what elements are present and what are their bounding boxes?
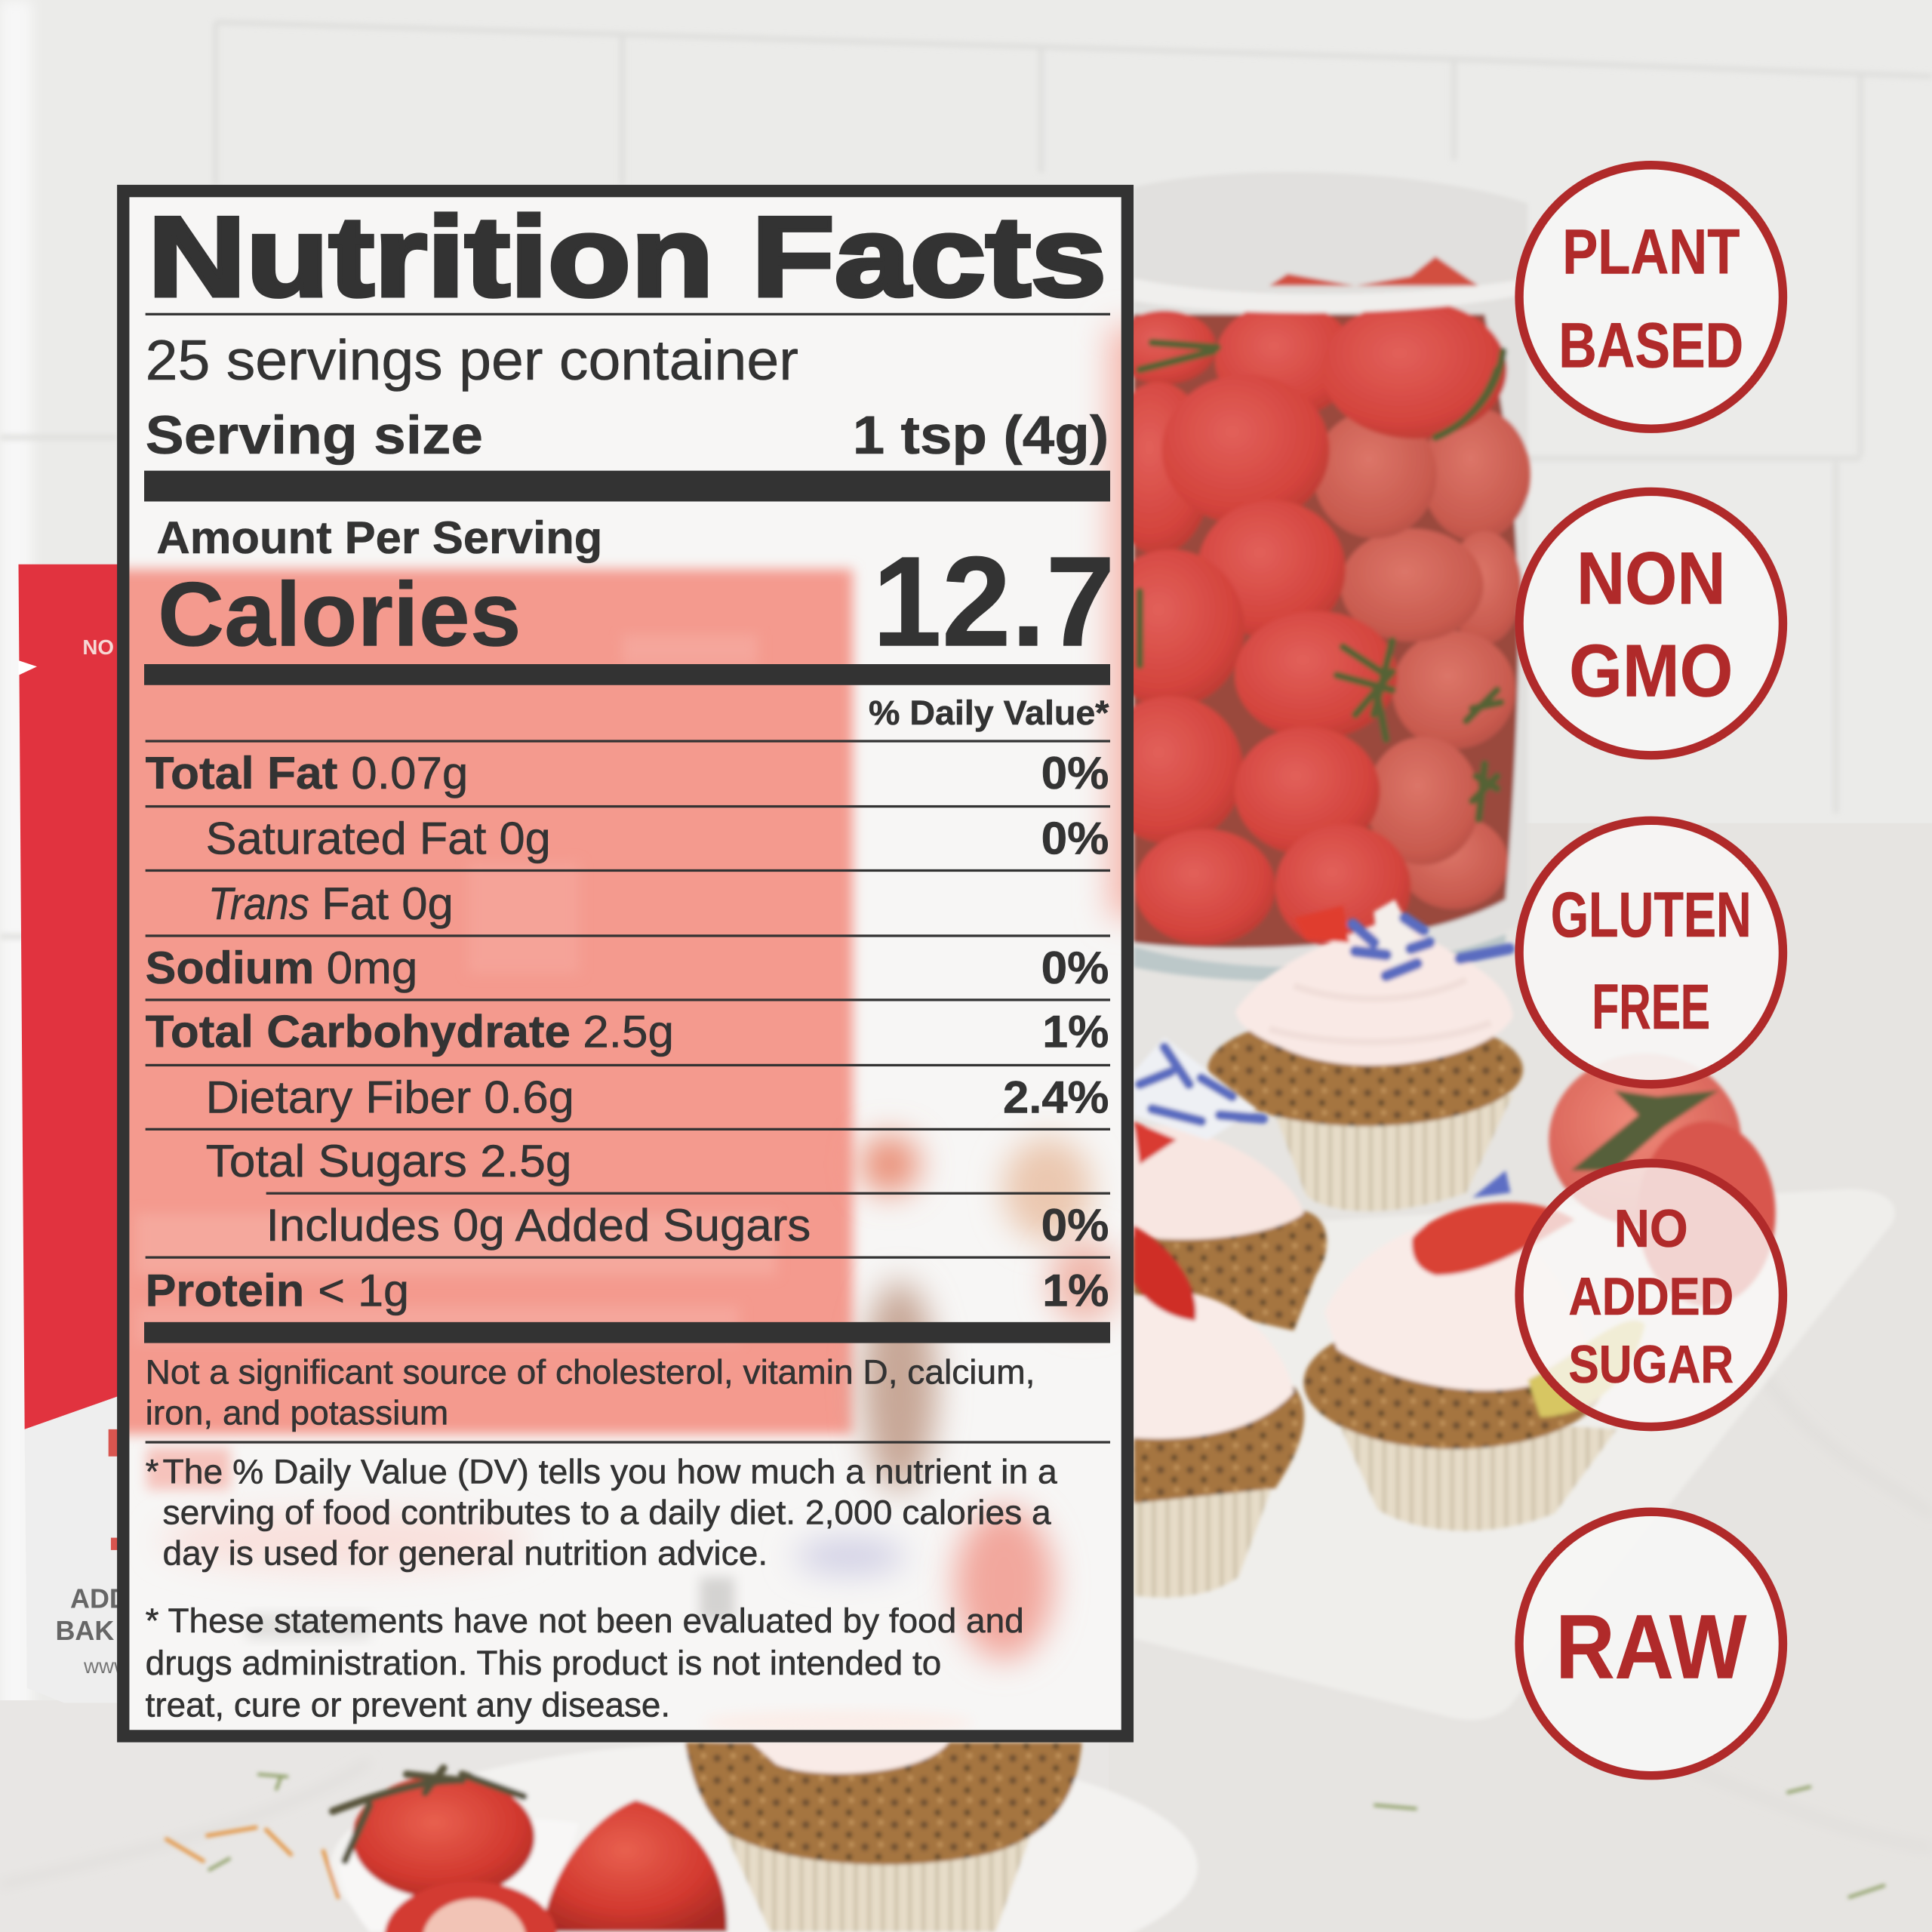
title: Nutrition Facts bbox=[148, 193, 1106, 320]
calories row: 12.7 bbox=[872, 530, 1115, 673]
badge: raw: RAW bbox=[1555, 1596, 1746, 1698]
badge: no added sugar: NO bbox=[1614, 1198, 1688, 1258]
row: saturated fat: Saturated Fat 0g bbox=[206, 812, 551, 863]
calories row bbox=[158, 530, 1115, 673]
serving size row: Serving size bbox=[146, 405, 483, 466]
serving size row bbox=[146, 405, 1109, 466]
badge: raw bbox=[1519, 1512, 1783, 1776]
row: total fat: 0% bbox=[1041, 747, 1109, 798]
row: saturated fat: 0% bbox=[1041, 812, 1109, 863]
calories row: Calories bbox=[158, 564, 521, 666]
row: total fat: 0.07g bbox=[351, 747, 468, 798]
footnote: daily value explanation: * bbox=[146, 1453, 159, 1491]
photo: marble serving board bbox=[1134, 1189, 1895, 1720]
daily value heading: % Daily Value* bbox=[869, 694, 1109, 732]
bag text fragments: ADD bbox=[70, 1583, 129, 1614]
row: protein: < 1g bbox=[318, 1265, 409, 1316]
row: sodium: 0mg bbox=[327, 942, 417, 993]
row: added sugars bbox=[266, 1199, 1109, 1251]
disclaimer bbox=[146, 1601, 1024, 1724]
badge: non gmo: GMO bbox=[1569, 629, 1733, 712]
footnote: daily value explanation: The % Daily Value (DV) tells you how much a nutrient in a bbox=[163, 1453, 1057, 1491]
photo: cupcake lower right bbox=[1303, 1171, 1645, 1531]
row: total sugars: Total Sugars 2.5g bbox=[206, 1135, 572, 1186]
row: sodium: Sodium bbox=[146, 942, 314, 993]
badge: plant based bbox=[1519, 165, 1783, 429]
badge: non gmo bbox=[1519, 491, 1783, 755]
servings per container: 25 servings per container bbox=[146, 328, 798, 392]
panel: nutrition facts label bbox=[74, 191, 1158, 1736]
badge: gluten free: GLUTEN bbox=[1551, 878, 1752, 950]
badge: no added sugar: SUGAR bbox=[1568, 1334, 1734, 1394]
photo: cupcake top right bbox=[1208, 900, 1523, 1211]
serving size row: 1 tsp (4g) bbox=[853, 405, 1109, 466]
row: trans fat: Fat 0g bbox=[321, 878, 454, 929]
disclaimer: treat, cure or prevent any disease. bbox=[146, 1685, 670, 1724]
row: trans fat: Trans bbox=[208, 878, 309, 929]
badge: gluten free bbox=[1519, 820, 1783, 1084]
badge: plant based: PLANT bbox=[1562, 215, 1740, 287]
footnote: not a significant source bbox=[146, 1352, 1035, 1432]
row: protein: Protein bbox=[146, 1265, 304, 1316]
bag text fragments: www bbox=[83, 1654, 130, 1678]
badge: no added sugar bbox=[1519, 1163, 1783, 1427]
footnote: daily value explanation bbox=[146, 1453, 1057, 1572]
photo: glass jar of strawberries bbox=[1097, 172, 1531, 981]
amount per serving heading: Amount Per Serving bbox=[156, 512, 602, 563]
badge: gluten free: FREE bbox=[1592, 971, 1710, 1042]
row: dietary fiber: 2.4% bbox=[1003, 1071, 1109, 1122]
row: trans fat bbox=[208, 878, 454, 929]
row: total fat bbox=[146, 747, 1109, 798]
row: total fat: Total Fat bbox=[146, 747, 337, 798]
photo: whole strawberries behind bbox=[1549, 1054, 1776, 1306]
photo: cupcake lower left bbox=[1134, 1226, 1304, 1598]
footnote: not a significant source: iron, and potassium bbox=[146, 1393, 448, 1432]
row: dietary fiber bbox=[206, 1071, 1109, 1122]
row: dietary fiber: Dietary Fiber 0.6g bbox=[206, 1071, 574, 1122]
row: total carbohydrate bbox=[146, 1006, 1109, 1057]
footnote: daily value explanation: day is used for general nutrition advice. bbox=[163, 1534, 768, 1572]
badge: plant based: BASED bbox=[1558, 309, 1743, 381]
row: protein bbox=[146, 1265, 1109, 1316]
bag text fragments: NO bbox=[82, 635, 114, 659]
row: total carbohydrate: Total Carbohydrate bbox=[146, 1006, 571, 1057]
photo: plate with cupcake and strawberries at bottom bbox=[165, 1741, 1885, 1932]
row: total carbohydrate: 2.5g bbox=[583, 1006, 674, 1057]
badge: non gmo: NON bbox=[1577, 537, 1726, 620]
badge: no added sugar: ADDED bbox=[1568, 1266, 1734, 1326]
bag text fragments: BAK bbox=[55, 1615, 114, 1646]
row: saturated fat bbox=[206, 812, 1109, 863]
footnote: not a significant source: Not a significant source of cholesterol, vitamin D, calcium, bbox=[146, 1352, 1035, 1391]
photo: product bag behind the label bbox=[18, 565, 130, 1703]
row: protein: 1% bbox=[1042, 1265, 1109, 1316]
nutrient table bbox=[146, 740, 1110, 1316]
photo: cupcake middle left bbox=[1134, 1038, 1327, 1331]
row: total carbohydrate: 1% bbox=[1042, 1006, 1109, 1057]
footnote: daily value explanation: serving of food contributes to a daily diet. 2,000 calories a bbox=[163, 1494, 1051, 1532]
row: added sugars: 0% bbox=[1041, 1199, 1109, 1251]
row: added sugars: Includes 0g Added Sugars bbox=[266, 1199, 811, 1251]
row: sodium: 0% bbox=[1041, 942, 1109, 993]
disclaimer: * These statements have not been evaluated by food and bbox=[146, 1601, 1024, 1640]
panel backdrop with faded photo bbox=[74, 191, 1158, 1736]
bag text fragments bbox=[55, 635, 130, 1678]
disclaimer: drugs administration. This product is not intended to bbox=[146, 1644, 941, 1682]
row: sodium bbox=[146, 942, 1109, 993]
